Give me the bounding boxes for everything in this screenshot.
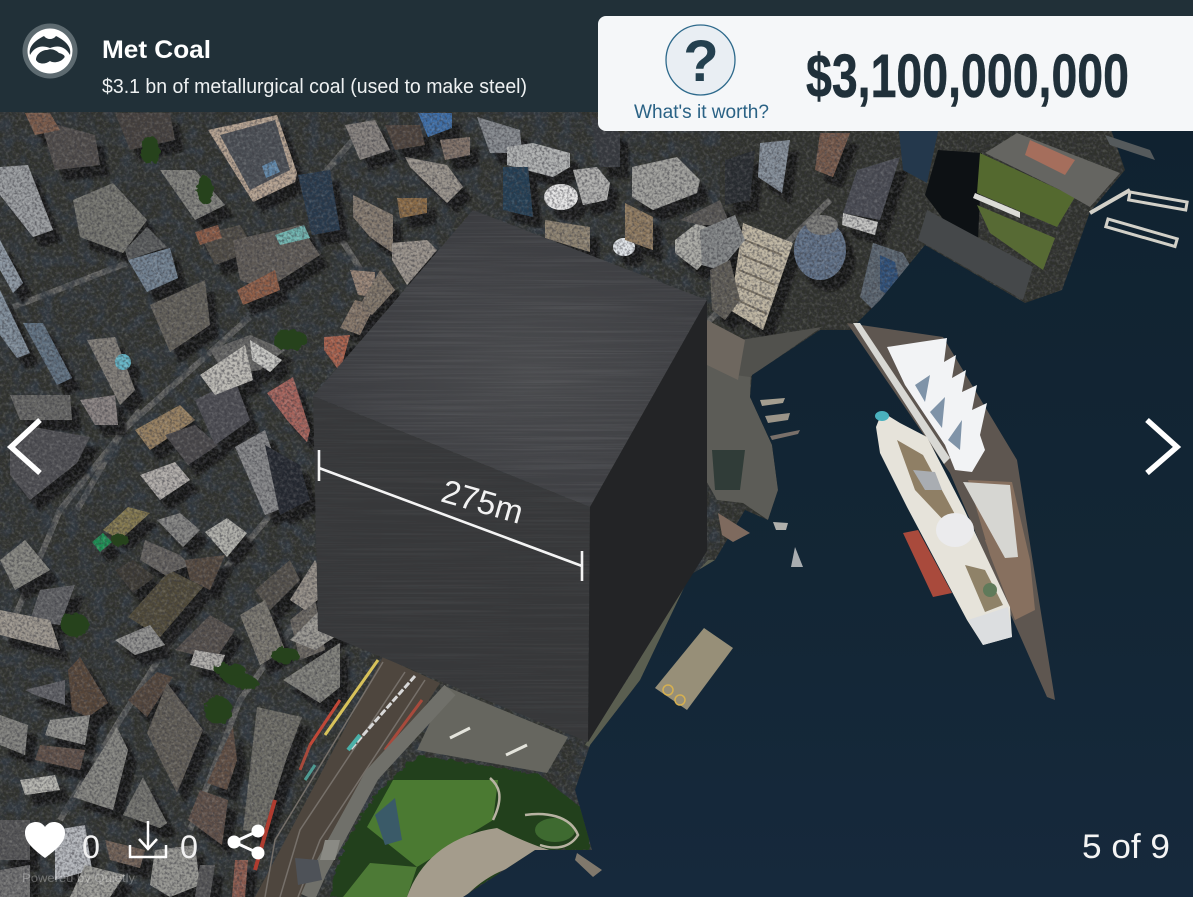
cube top face	[314, 210, 707, 507]
cube left face	[313, 397, 590, 742]
share icon	[228, 824, 264, 860]
small vessels	[718, 398, 803, 567]
dimension label: 275m	[438, 472, 528, 531]
arrow: next	[1147, 420, 1177, 473]
top-right marina	[1105, 135, 1155, 160]
download control: 0	[180, 829, 198, 865]
logo badge	[22, 24, 78, 78]
beach	[407, 828, 549, 897]
rail yard	[255, 657, 440, 897]
jetty	[575, 853, 602, 877]
waterfront park and piers	[918, 210, 1033, 300]
coal cube	[313, 210, 707, 742]
slide counter: 5 of 9	[1082, 828, 1170, 866]
white sails	[887, 338, 987, 472]
like control	[25, 822, 100, 865]
card title: Met Coal	[102, 36, 211, 64]
white tent roof	[963, 482, 1018, 558]
download control	[130, 821, 198, 865]
park lawn	[367, 780, 498, 867]
parking lot and road	[417, 687, 568, 773]
what's it worth label: What's it worth?	[634, 102, 769, 123]
Canada Place pier	[847, 323, 1055, 700]
like control: 0	[82, 829, 100, 865]
question icon	[666, 25, 735, 95]
powered by: Powered by Quietly	[22, 871, 135, 885]
arrow: previous	[11, 420, 40, 473]
tower shadow by the park	[925, 150, 982, 240]
window grid on tower	[733, 240, 782, 314]
helipad barge	[655, 628, 733, 710]
shoreline along cube	[585, 560, 715, 748]
header bar	[0, 0, 1193, 112]
card subtitle: $3.1 bn of metallurgical coal (used to make steel)	[102, 76, 527, 98]
glass tower	[899, 131, 938, 183]
dimension line	[319, 450, 582, 581]
floating docks	[1090, 190, 1187, 247]
red barge	[903, 530, 952, 597]
park trees	[330, 755, 590, 897]
cube right face	[588, 300, 707, 742]
city buildings	[0, 113, 930, 897]
dark tree canopies	[61, 136, 308, 724]
value panel	[598, 16, 1193, 131]
cruise ship	[875, 411, 1012, 645]
question icon: ?	[683, 29, 719, 94]
street network	[5, 120, 830, 830]
